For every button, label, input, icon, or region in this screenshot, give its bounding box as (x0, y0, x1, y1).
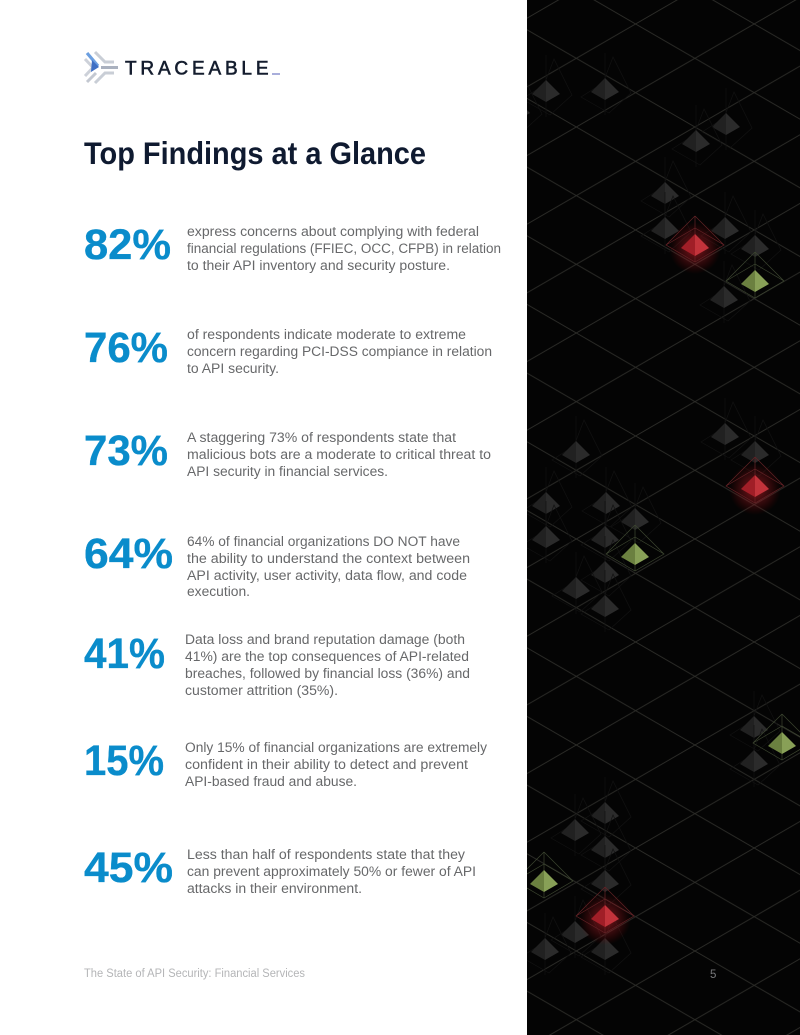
page number: 5 (710, 969, 716, 981)
description: API-based fraud and abuse. (185, 774, 357, 790)
icon: logo arrows (85, 52, 118, 83)
description: financial regulations (FFIEC, OCC, CFPB) in relation (187, 241, 501, 257)
stat: 45% (84, 844, 476, 897)
description: confident in their ability to detect and prevent (185, 757, 468, 773)
description: concern regarding PCI-DSS compiance in relation (187, 344, 492, 360)
logo underscore (272, 73, 280, 75)
description: attacks in their environment. (187, 881, 362, 897)
panel: dark isometric grid (527, 0, 800, 1035)
title: Top Findings at a Glance (84, 135, 426, 171)
stat: 76% (84, 324, 492, 377)
number 64%: 64% (84, 530, 173, 578)
description (185, 740, 488, 790)
description: malicious bots are a moderate to critical threat to (187, 447, 491, 463)
number 41%: 41% (84, 630, 165, 678)
description (187, 327, 492, 377)
logo wordmark: TRACEABLE (125, 58, 268, 80)
stat: 82% (84, 221, 501, 274)
number 76%: 76% (84, 324, 168, 372)
description: can prevent approximately 50% or fewer of API (187, 864, 476, 880)
description: to API security. (187, 361, 279, 377)
description: customer attrition (35%). (185, 683, 338, 699)
description: breaches, followed by financial loss (36%) and (185, 666, 470, 682)
stat: 41% (84, 630, 470, 699)
description: Data loss and brand reputation damage (both (185, 632, 465, 648)
number 45%: 45% (84, 844, 173, 892)
description: to their API inventory and security posture. (187, 258, 450, 274)
description: API security in financial services. (187, 464, 388, 480)
description (187, 430, 491, 480)
description: execution. (187, 584, 250, 600)
description: 41%) are the top consequences of API-related (185, 649, 469, 665)
stat: 73% (84, 427, 491, 480)
number 82%: 82% (84, 221, 171, 269)
description: 64% of financial organizations DO NOT have (187, 534, 460, 550)
footer text: The State of API Security: Financial Services (84, 968, 305, 980)
description: Less than half of respondents state that they (187, 847, 466, 863)
description: Only 15% of financial organizations are extremely (185, 740, 488, 756)
description (187, 534, 470, 600)
stat: 15% (84, 737, 488, 790)
description: of respondents indicate moderate to extreme (187, 327, 466, 343)
number 73%: 73% (84, 427, 168, 475)
number 15%: 15% (84, 737, 164, 785)
description: express concerns about complying with federal (187, 224, 479, 240)
logo: Traceable (85, 52, 280, 83)
page background (0, 0, 527, 1035)
description: A staggering 73% of respondents state that (187, 430, 456, 446)
description (185, 632, 470, 699)
description (187, 224, 501, 274)
description (187, 847, 476, 897)
description: the ability to understand the context between (187, 551, 470, 567)
description: API activity, user activity, data flow, and code (187, 568, 467, 584)
stat: 64% (84, 530, 470, 600)
